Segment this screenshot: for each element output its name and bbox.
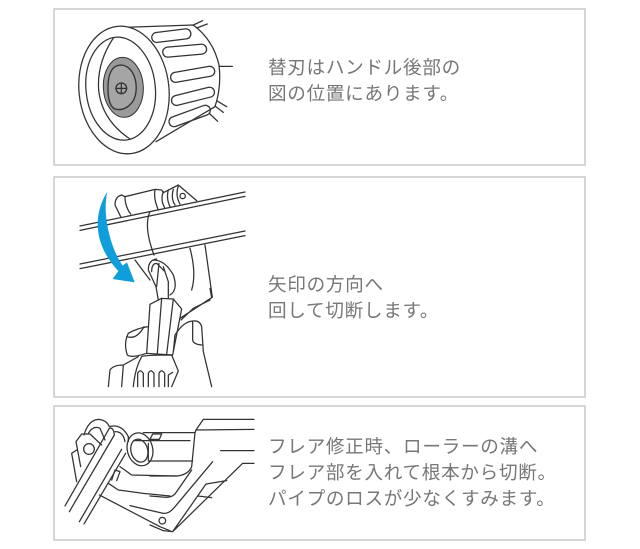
cutter head and pipe bbox=[80, 185, 245, 297]
instruction text 2: 回して切断します。 bbox=[268, 300, 439, 321]
illustration: cutter with flare roller bbox=[65, 419, 254, 532]
instruction text 2: 矢印の方向へ bbox=[268, 274, 384, 295]
illustration: cutter on pipe bbox=[80, 185, 245, 387]
icon: blue rotation arrow bbox=[98, 192, 135, 282]
illustration: handle rear bbox=[73, 21, 232, 158]
panel: blade location bbox=[54, 9, 585, 165]
left part: wrench arms and roller bbox=[65, 419, 190, 531]
instruction text 3: パイプのロスが少なくすみます。 bbox=[268, 488, 556, 509]
panel: cutting direction bbox=[54, 177, 585, 397]
instruction text 1: 替刃はハンドル後部の bbox=[268, 57, 461, 78]
instruction text 3: フレア修正時、ローラーの溝へ bbox=[268, 436, 538, 457]
panel: flare correction bbox=[54, 406, 585, 540]
instruction text 1: 図の位置にあります。 bbox=[268, 83, 459, 104]
instruction text 3: フレア部を入れて根本から切断。 bbox=[268, 462, 557, 483]
hand and driver bbox=[108, 288, 212, 387]
cutter clip bbox=[148, 259, 175, 300]
right part: cutter body bbox=[130, 419, 254, 532]
